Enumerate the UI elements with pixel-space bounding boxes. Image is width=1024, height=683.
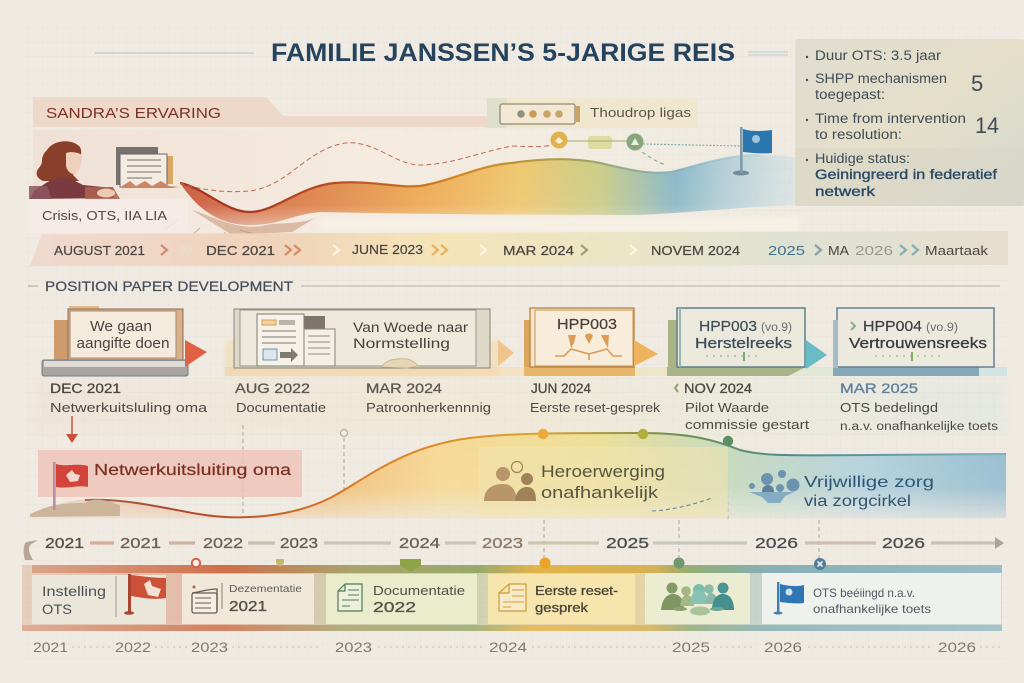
heading: SANDRA’S ERVARING <box>46 105 221 122</box>
year axis: 2026 <box>755 536 798 552</box>
card: documentatie 2022: 2022 <box>373 599 416 616</box>
card: HPP004 vertrouwensreeks: (vo.9) <box>926 322 958 334</box>
panel: key stats: SHPP mechanismen <box>815 71 947 86</box>
arrow <box>498 340 514 366</box>
date band: JUNE 2023 <box>352 242 423 257</box>
card: HPP003 <box>524 308 635 376</box>
arrow <box>806 340 827 369</box>
card: eerste reset-gesprek: Eerste reset- <box>535 583 618 598</box>
panel: key stats: to resolution: <box>815 127 902 142</box>
bottom year labels: 2025 <box>672 640 710 655</box>
year axis: 2022 <box>203 536 243 552</box>
callout: heroerwerging onafhankelijk: Heroerwerging <box>541 462 665 481</box>
card: documentatie 2022 <box>326 574 477 624</box>
panel: key stats: netwerk <box>815 183 876 199</box>
milestone captions: AUG 2022 <box>235 381 310 396</box>
bottom year labels: 2022 <box>115 640 151 655</box>
card: dezementatie 2021: Dezementatie <box>229 583 302 595</box>
milestone captions <box>50 381 998 433</box>
milestone captions: n.a.v. onafhankelijke toets <box>840 421 998 433</box>
panel: key stats: Huidige status: <box>815 151 910 166</box>
callout: netwerkuitsluiting oma: Netwerkuitsluiting oma <box>94 462 291 479</box>
bottom timeline bar <box>22 565 1002 631</box>
card: OTS beeindigd <box>762 573 1001 624</box>
panel: key stats: 14 <box>975 113 999 138</box>
year axis: 2021 <box>120 536 161 552</box>
card: van woede naar normstelling: Normstelling <box>353 335 450 351</box>
panel: key stats <box>795 39 1024 206</box>
panel: key stats: Geiningreerd in federatief <box>815 166 997 182</box>
milestone captions: Netwerkuitsluling oma <box>50 400 208 415</box>
milestone dots on wave <box>538 429 733 446</box>
card: HPP004 vertrouwensreeks: Vertrouwensreeks <box>849 336 987 352</box>
legend tag: Thoudrop ligas: Thoudrop ligas <box>590 105 692 120</box>
panel: Sandra's ervaring <box>27 97 799 234</box>
card: HPP004 vertrouwensreeks <box>833 308 994 376</box>
milestone captions: Eerste reset-gesprek <box>530 400 661 415</box>
card: documentatie 2022: Documentatie <box>373 583 465 598</box>
milestone captions: JUN 2024 <box>531 381 591 396</box>
callout: vrijwillige zorg: via zorgcirkel <box>804 493 911 510</box>
bottom year labels: 2026 <box>764 640 802 655</box>
milestone captions: Patroonherkennnig <box>366 400 491 415</box>
panel: key stats: Time from intervention <box>815 111 966 126</box>
milestone captions: DEC 2021 <box>50 381 121 396</box>
card: HPP003 herstelreeks: HPP003 <box>699 319 757 335</box>
year axis: 2025 <box>606 536 649 552</box>
heading <box>33 97 500 127</box>
year axis: 2023 <box>482 536 523 552</box>
recovery wave chart <box>30 433 1006 518</box>
card: OTS beeindigd: OTS beéiingd n.a.v. <box>813 586 915 600</box>
bottom year labels: 2023 <box>191 640 228 655</box>
crisis label: Crisis, OTS, IIA LIA <box>42 208 167 223</box>
date band: Maartaak <box>925 243 989 258</box>
card: OTS beeindigd: onafhankelijke toets <box>813 602 931 616</box>
card: dezementatie 2021: 2021 <box>229 599 267 615</box>
date band: NOVEM 2024 <box>651 243 740 258</box>
card: HPP004 vertrouwensreeks: HPP004 <box>863 319 922 335</box>
card: we gaan aangifte doen: We gaan <box>90 319 152 335</box>
callout: vrijwillige zorg <box>652 470 934 511</box>
icon: document stack <box>116 147 179 188</box>
experience wave chart <box>164 154 795 234</box>
bottom year labels: 2024 <box>489 640 528 655</box>
panel: key stats: 5 <box>971 71 983 96</box>
bottom year labels <box>33 640 1003 655</box>
card: we gaan aangifte doen: aangifte doen <box>76 336 170 352</box>
icon: red flag <box>124 574 166 615</box>
date band: DEC 2021 <box>206 243 275 258</box>
card: we gaan aangifte doen <box>42 306 188 376</box>
milestone captions: OTS bedelingd <box>840 400 938 415</box>
milestone captions: NOV 2024 <box>684 381 753 396</box>
year axis: 2024 <box>399 536 440 552</box>
milestone captions: Pilot Waarde <box>685 400 769 415</box>
arrow <box>185 340 207 367</box>
bottom year labels: 2026 <box>938 640 976 655</box>
heading: position paper development: POSITION PAPER DEVELOPMENT <box>45 278 293 294</box>
title: FAMILIE JANSSEN’S 5-JARIGE REIS <box>271 39 735 67</box>
card: HPP003 herstelreeks: (vo.9) <box>761 322 792 334</box>
timeline markers <box>192 558 826 572</box>
card: dezementatie 2021 <box>182 574 314 624</box>
callout: vrijwillige zorg: Vrijwillige zorg <box>804 474 934 491</box>
dashed trajectory line <box>180 143 552 192</box>
timeline baseline wash <box>30 367 1007 436</box>
date band: MA <box>828 243 849 258</box>
milestone captions: commissie gestart <box>685 417 809 432</box>
bottom year labels: 2021 <box>33 640 68 655</box>
year axis <box>24 536 1004 560</box>
arrow <box>634 340 658 366</box>
crisis label <box>28 199 188 233</box>
date band: MAR 2024 <box>503 243 574 258</box>
arrow: down to red flag <box>66 416 78 443</box>
card: zorgcirkel group icon <box>645 573 750 624</box>
panel: key stats: toegepast: <box>815 87 885 102</box>
icon: blue destination flag <box>733 127 772 176</box>
panel wash <box>27 130 803 232</box>
callout: netwerkuitsluiting oma <box>38 450 302 510</box>
date band <box>30 231 1008 266</box>
milestone captions: Documentatie <box>236 400 326 415</box>
date band: 2026 <box>855 243 893 258</box>
panel: key stats: Duur OTS: 3.5 jaar <box>815 48 942 63</box>
bottom year labels: 2023 <box>335 640 372 655</box>
callout: heroerwerging onafhankelijk: onafhankelijk <box>541 483 659 502</box>
card: van woede naar normstelling: Van Woede naar <box>353 319 468 335</box>
card: HPP003 herstelreeks: Herstelreeks <box>695 336 792 352</box>
milestone captions: MAR 2025 <box>840 381 918 396</box>
legend tag: Thoudrop ligas <box>487 98 698 128</box>
year axis: 2023 <box>280 536 318 552</box>
icon: woman <box>29 141 120 199</box>
card: eerste reset-gesprek: gesprek <box>535 600 589 615</box>
callout: heroerwerging onafhankelijk <box>479 447 728 518</box>
drop lines <box>243 425 819 560</box>
date band: AUGUST 2021 <box>54 243 145 258</box>
year axis: 2026 <box>882 536 925 552</box>
card: instelling OTS <box>32 574 166 624</box>
milestone markers on line <box>550 132 740 165</box>
card: instelling OTS: OTS <box>42 601 72 617</box>
card: instelling OTS: Instelling <box>42 583 106 599</box>
milestone captions: MAR 2024 <box>366 381 443 396</box>
card: HPP003 herstelreeks <box>667 308 806 376</box>
date band: 2025 <box>768 243 805 258</box>
card: van woede naar normstelling <box>225 309 500 376</box>
card: HPP003: HPP003 <box>557 317 617 333</box>
card: eerste reset-gesprek <box>488 574 635 624</box>
year axis: 2021 <box>45 536 84 552</box>
